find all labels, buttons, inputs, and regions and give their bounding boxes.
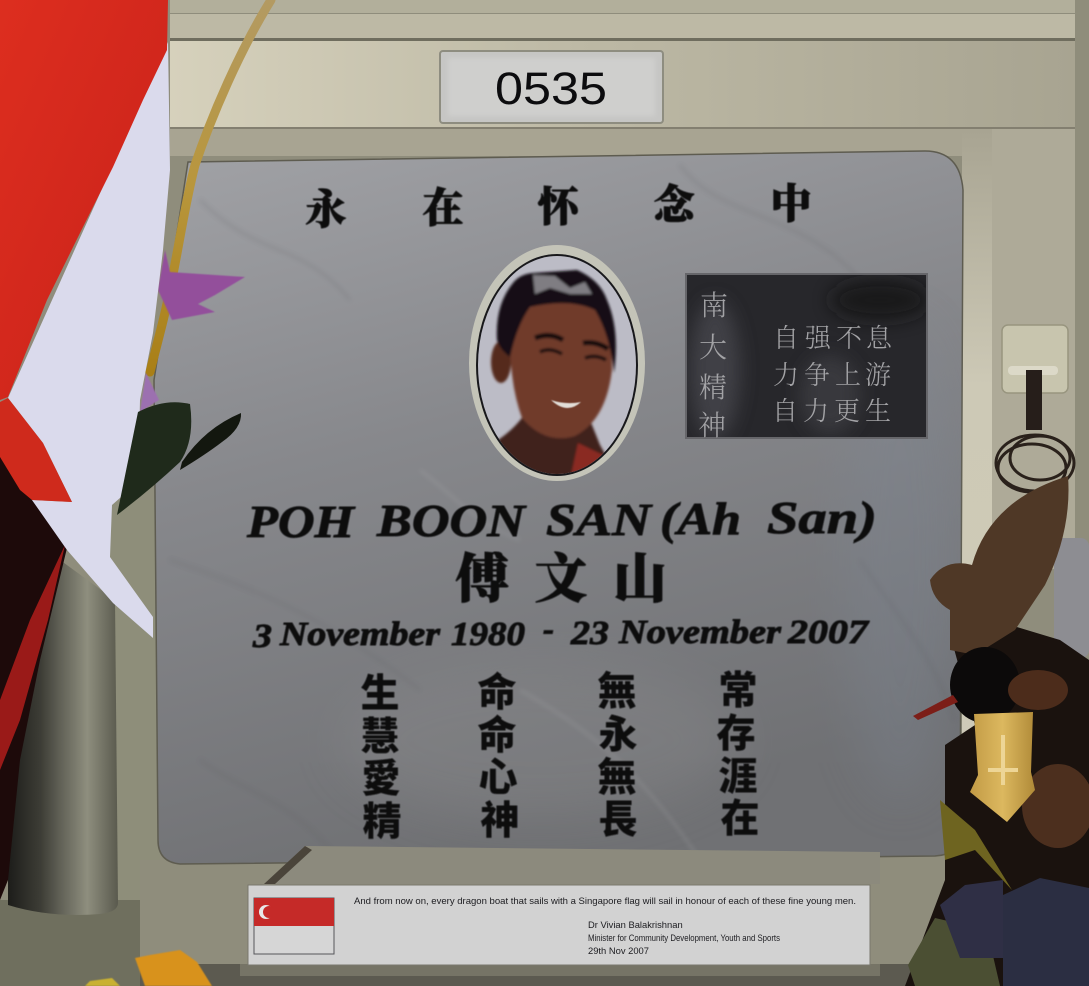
hanging keepsakes [905,476,1089,986]
dark body [905,625,1089,986]
chinese verse columns [360,660,760,847]
brown knob [1008,670,1068,710]
dates: 3 [252,618,272,655]
name: english: POH [246,496,355,547]
label attribution [588,919,780,956]
portrait hair sheen [533,275,592,294]
plant stem [150,0,271,372]
red pick [913,695,958,720]
heading: chinese memorial line: 在 [422,175,464,234]
black motto plaque: 南 [700,284,728,324]
brown soft blob [1022,764,1089,848]
green leaves [117,402,241,515]
chinese verse columns: 精 [362,791,402,847]
purple flower [140,250,245,412]
chinese verse columns: 愛 [361,748,401,804]
heading: chinese memorial line: 念 [654,172,698,231]
portrait brows and eyes [535,335,608,349]
name: english: SAN [546,494,653,545]
portrait ear [491,341,511,383]
chinese verse columns: 長 [598,789,638,845]
blue cloth [1003,878,1089,986]
number plate: 0535 [495,63,607,114]
gold leaf [940,800,1012,890]
portrait hair [497,270,616,373]
name: english: San) [767,492,877,543]
name: english [246,492,877,547]
name: chinese [456,537,666,613]
navy knit [940,880,1003,958]
black motto plaque: 自 [773,318,799,355]
portrait torso [498,416,606,474]
label attribution: Dr Vivian Balakrishnan [588,919,683,930]
black motto plaque: 更 [834,391,860,428]
black motto plaque [686,274,930,444]
brown plush [930,476,1069,655]
label attribution: 29th Nov 2007 [588,945,649,956]
dates: 2007 [787,614,870,651]
black motto plaque: 不 [836,318,862,355]
heading: chinese memorial line: 中 [770,171,812,230]
heading: chinese memorial line: 永 [306,177,346,236]
oval portrait [469,245,645,481]
marble plaque [154,151,963,864]
dates [252,611,870,655]
dates: 1980 [451,616,525,653]
silver cup [1054,538,1089,658]
gold anchor tag [970,712,1035,822]
chinese verse columns: 生 [360,663,400,719]
label quote: And from now on, every dragon boat that sails with a Singapore flag will sail in honour of each of these fine young men. [354,895,856,906]
number plate [440,51,663,123]
dates: 23 [570,615,609,652]
black motto plaque: 强 [805,318,832,355]
chinese verse columns: 無 [597,747,637,803]
black motto plaque: 息 [866,318,893,355]
singapore flag on the left [0,0,170,900]
chinese verse columns: 命 [477,705,517,761]
flag white stripe [8,42,170,638]
dates: - [543,611,554,648]
heading: chinese memorial line: 怀 [538,174,582,233]
bottom ledge [240,846,880,976]
heading: chinese memorial line [306,171,812,236]
portrait red shirt [570,442,603,472]
chinese verse columns: 心 [478,747,518,803]
black motto plaque: 生 [865,391,891,428]
portrait smile [551,400,581,408]
black motto plaque: 上 [835,355,861,392]
chinese verse columns: 無 [597,661,637,717]
portrait face [510,300,612,438]
name: english: BOON [376,495,527,546]
label flag [254,898,334,954]
flag red corner [0,398,72,502]
black motto plaque: 力 [773,355,799,392]
metal pipe [8,560,118,915]
flag dark folds [0,450,67,900]
flag red stripe [0,0,168,400]
black motto plaque: 争 [804,355,830,392]
green knit [908,918,1000,986]
black motto plaque: 神 [698,404,726,444]
chinese verse columns: 在 [720,788,760,844]
chinese verse columns: 存 [716,703,756,759]
key rings [996,435,1074,492]
chinese verse columns: 涯 [718,746,758,802]
chinese verse columns: 永 [598,704,638,760]
dates: November [279,616,441,653]
label attribution: Minister for Community Development, Youth and Sports [588,932,780,943]
name: chinese: 傅 [456,537,508,613]
chinese verse columns: 命 [477,662,517,718]
chinese verse columns: 神 [480,790,520,846]
name: chinese: 文 [534,537,588,613]
black motto plaque: 大 [699,326,727,366]
black motto plaque: 精 [699,366,727,406]
name: english: (Ah [660,493,741,544]
black motto plaque: 力 [803,391,829,428]
black motto plaque: 游 [865,355,891,392]
yellow flower [85,950,212,986]
black motto plaque: 自 [772,391,798,428]
chinese verse columns: 慧 [360,706,400,762]
dates: November [618,614,782,651]
name: chinese: 山 [614,537,666,613]
wall hook [1002,325,1068,430]
black knot [950,647,1020,723]
chinese verse columns: 常 [718,660,758,716]
citation label [248,885,870,965]
